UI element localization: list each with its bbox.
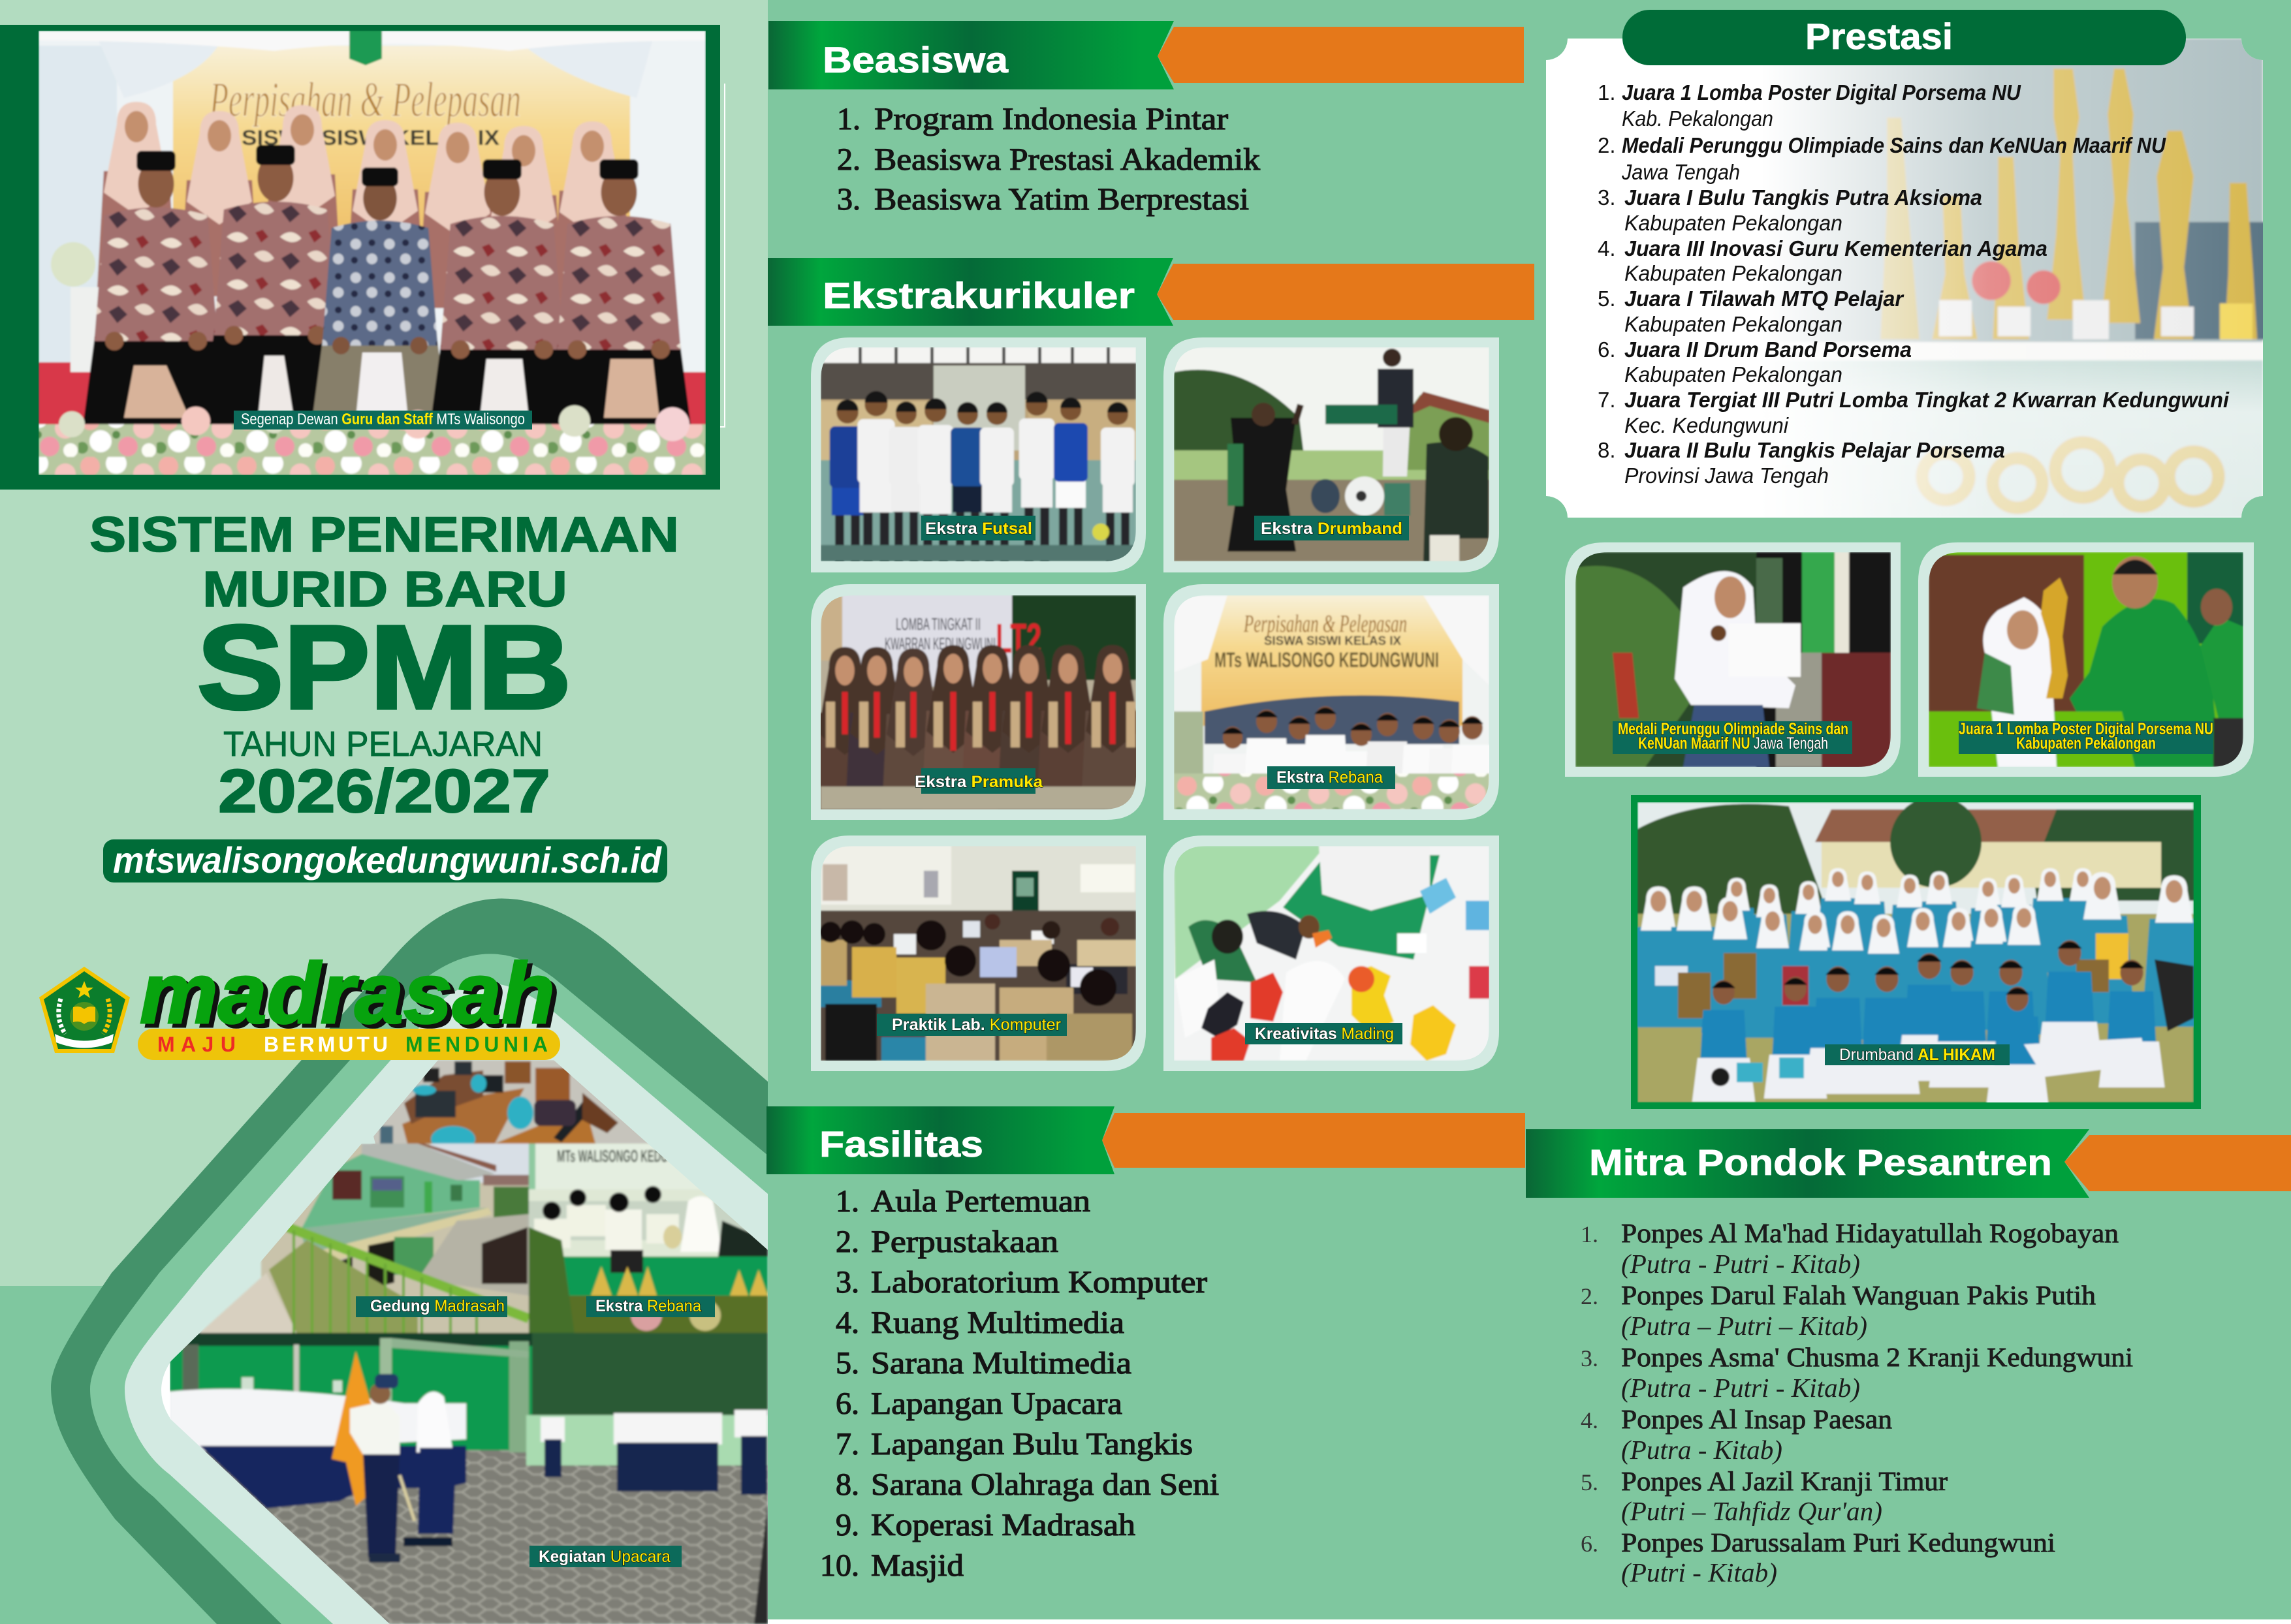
banner: Beasiswa: Beasiswa [823, 39, 1009, 80]
list: Prestasi: Juara I Tilawah MTQ Pelajar [1624, 287, 1904, 311]
list: Fasilitas: Aula Pertemuan [871, 1184, 1090, 1219]
list: Prestasi: Kec. Kedungwuni [1624, 413, 1790, 437]
list: Mitra Pondok Pesantren: 6. [1581, 1531, 1598, 1557]
banner: Beasiswa [768, 21, 1524, 89]
list: Prestasi: Kabupaten Pekalongan [1624, 211, 1842, 235]
caption: staff photo: Segenap Dewan Guru dan Staff MTs Walisongo [241, 411, 525, 428]
list: Prestasi: Juara II Bulu Tangkis Pelajar Porsema [1624, 438, 2005, 462]
banner: Mitra Pondok Pesantren [1526, 1129, 2291, 1198]
list: Mitra Pondok Pesantren: 1. [1581, 1221, 1598, 1247]
list: Fasilitas: 8. [836, 1467, 859, 1502]
list: Prestasi: 4. [1598, 236, 1616, 260]
photo card: Ekstra Pramuka: KWARRAN KEDUNGWUNI [885, 634, 996, 653]
photo card: Ekstra Rebana: Ekstra Rebana [1276, 768, 1383, 787]
list: Beasiswa: Beasiswa Prestasi Akademik [874, 142, 1260, 177]
list: Mitra Pondok Pesantren: 4. [1581, 1407, 1598, 1433]
list: Prestasi: 5. [1598, 287, 1616, 311]
collage: rebana group [529, 1144, 768, 1334]
heading pill: Prestasi: Prestasi [1805, 16, 1953, 57]
photo collage [170, 1060, 768, 1624]
list: Mitra Pondok Pesantren: (Putra - Putri - Kitab) [1621, 1249, 1860, 1279]
title: Sistem Penerimaan Murid Baru: SISTEM PENERIMAAN [89, 507, 679, 563]
photo card: Ekstra Rebana [1163, 584, 1502, 839]
list: Mitra Pondok Pesantren: Ponpes Asma' Chusma 2 Kranji Kedungwuni [1621, 1342, 2133, 1372]
list: Fasilitas: Laboratorium Komputer [871, 1265, 1207, 1300]
heading: SPMB: SPMB [197, 601, 571, 734]
tagline pill: Maju Bermutu Mendunia: BERMUTU [264, 1033, 388, 1056]
list: Fasilitas: Lapangan Bulu Tangkis [871, 1427, 1193, 1461]
list: Prestasi: Medali Perunggu Olimpiade Sains dan KeNUan Maarif NU [1622, 133, 2166, 157]
list: Fasilitas: Sarana Olahraga dan Seni [871, 1467, 1219, 1502]
photo card: Ekstra Futsal: Ekstra Futsal [925, 520, 1032, 538]
photo card: Kreativitas Mading [1163, 835, 1499, 1071]
list: Fasilitas: Ruang Multimedia [871, 1305, 1124, 1340]
list: Mitra Pondok Pesantren: Ponpes Darul Falah Wanguan Pakis Putih [1621, 1280, 2096, 1310]
photo card: Ekstra Pramuka: LOMBA TINGKAT II [896, 614, 981, 634]
list: Beasiswa: Program Indonesia Pintar [874, 102, 1228, 136]
list: Fasilitas: Masjid [871, 1548, 964, 1583]
list: Prestasi: 7. [1598, 388, 1616, 412]
photo card: Ekstra Drumband [1163, 337, 1499, 572]
list: Mitra Pondok Pesantren: Ponpes Darussalam Puri Kedungwuni [1621, 1527, 2055, 1557]
caption: Ekstra Rebana: Ekstra Rebana [595, 1297, 701, 1315]
list: Mitra Pondok Pesantren [1581, 1218, 2133, 1587]
list: Fasilitas: Lapangan Upacara [871, 1386, 1122, 1421]
photo card: Ekstra Rebana: MTs WALISONGO KEDUNGWUNI [1214, 648, 1439, 672]
list: Beasiswa: Beasiswa Yatim Berprestasi [874, 182, 1249, 217]
list: Prestasi: Juara II Drum Band Porsema [1624, 337, 1912, 362]
photo frame: staff group photo: SISWA SISWI KELAS IX [242, 126, 500, 149]
photo: Drumband Al Hikam [1628, 795, 2206, 1109]
photo frame: staff group photo [0, 25, 720, 490]
photo card: Ekstra Pramuka: Ekstra Pramuka [915, 773, 1043, 791]
list: Mitra Pondok Pesantren: 2. [1581, 1283, 1598, 1309]
photo card: poster trophy [1918, 542, 2254, 777]
list: Mitra Pondok Pesantren: 5. [1581, 1469, 1598, 1495]
photo card: poster trophy: Juara 1 Lomba Poster Digital Porsema NU [1959, 720, 2213, 738]
logo: Madrasah wordmark: madrasah [144, 949, 560, 1045]
list: Prestasi: 3. [1598, 185, 1616, 210]
collage: flag ceremony [170, 1333, 768, 1624]
panel: right background [767, 0, 2291, 1619]
text: Tahun Pelajaran: TAHUN PELAJARAN [223, 725, 543, 764]
list: Fasilitas: 10. [820, 1548, 859, 1583]
list: Prestasi: 6. [1598, 337, 1616, 362]
title: Sistem Penerimaan Murid Baru [89, 507, 679, 617]
list: Mitra Pondok Pesantren: (Putra - Putri - Kitab) [1621, 1373, 1860, 1403]
photo card: Praktik Lab Komputer: Praktik Lab. Komputer [892, 1016, 1061, 1034]
list: Beasiswa: 2. [837, 142, 861, 177]
list: Fasilitas [820, 1184, 1219, 1583]
decorative chevron with photos [51, 898, 768, 1624]
list: Fasilitas: Koperasi Madrasah [871, 1508, 1135, 1542]
list: Mitra Pondok Pesantren: (Putra - Kitab) [1621, 1435, 1782, 1465]
panel: Prestasi [1546, 39, 2266, 518]
caption: Gedung Madrasah: Gedung Madrasah [370, 1297, 505, 1315]
banner: Fasilitas: Fasilitas [819, 1123, 983, 1164]
list: Fasilitas: 3. [836, 1265, 859, 1300]
photo card: Ekstra Rebana: SISWA SISWI KELAS IX [1264, 634, 1401, 648]
list: Mitra Pondok Pesantren: 3. [1581, 1345, 1598, 1371]
list: Beasiswa [837, 102, 1260, 217]
list: Mitra Pondok Pesantren: (Putri - Kitab) [1621, 1557, 1777, 1587]
photo card: Ekstra Pramuka: LT2 [996, 615, 1041, 662]
collage: school building [200, 1144, 530, 1334]
list: Prestasi: Kabupaten Pekalongan [1624, 261, 1842, 285]
list: Prestasi: 1. [1598, 80, 1616, 104]
title: Sistem Penerimaan Murid Baru: MURID BARU [202, 561, 567, 617]
text: school year: 2026/2027 [218, 757, 550, 825]
list: Fasilitas: Sarana Multimedia [871, 1346, 1131, 1381]
list: Prestasi: Juara I Bulu Tangkis Putra Aksioma [1624, 185, 1982, 210]
photo card: Praktik Lab Komputer [811, 835, 1146, 1071]
photo: trophies background [1546, 39, 2266, 518]
photo card: Ekstra Pramuka [811, 584, 1146, 824]
list: Fasilitas: 6. [836, 1386, 859, 1421]
collage: computer lab [372, 1060, 653, 1152]
photo card: Ekstra Rebana: Perpisahan & Pelepasan [1243, 610, 1407, 638]
photo card: medal and certificate [1565, 542, 1901, 777]
list: Fasilitas: 9. [836, 1508, 859, 1542]
list: Prestasi: Juara III Inovasi Guru Kementerian Agama [1624, 236, 2047, 260]
list: Fasilitas: 2. [836, 1225, 859, 1259]
list: Prestasi: Juara 1 Lomba Poster Digital Porsema NU [1622, 80, 2021, 104]
photo card: Kreativitas Mading: Kreativitas Mading [1255, 1025, 1394, 1043]
list: Prestasi [1598, 80, 2230, 488]
list: Prestasi: Kabupaten Pekalongan [1624, 312, 1842, 336]
list: Prestasi: 8. [1598, 438, 1616, 462]
list: Fasilitas: 1. [836, 1184, 859, 1219]
banner: Ekstrakurikuler: Ekstrakurikuler [823, 275, 1135, 316]
list: Beasiswa: 3. [837, 182, 861, 217]
list: Mitra Pondok Pesantren: (Putri – Tahfidz Qur'an) [1621, 1496, 1882, 1526]
list: Prestasi: Provinsi Jawa Tengah [1624, 463, 1829, 488]
tagline pill: Maju Bermutu Mendunia: M A J U [157, 1033, 236, 1056]
heading pill: Prestasi [1622, 10, 2186, 65]
banner: Ekstrakurikuler [768, 258, 1534, 326]
list: Beasiswa: 1. [837, 102, 861, 136]
list: Prestasi: Kab. Pekalongan [1622, 106, 1773, 131]
list: Prestasi: Juara Tergiat III Putri Lomba Tingkat 2 Kwarran Kedungwuni [1624, 388, 2230, 412]
banner: Mitra Pondok Pesantren: Mitra Pondok Pesantren [1589, 1142, 2052, 1183]
panel: left cover [0, 0, 768, 1624]
list: Mitra Pondok Pesantren: Ponpes Al Jazil Kranji Timur [1621, 1466, 1948, 1496]
list: Mitra Pondok Pesantren: Ponpes Al Ma'had Hidayatullah Rogobayan [1621, 1218, 2119, 1248]
website pill: mtswalisongokedungwuni.sch.id [113, 839, 663, 881]
caption: Kegiatan Upacara: Kegiatan Upacara [539, 1548, 671, 1566]
photo card: medal and certificate: KeNUan Maarif NU Jawa Tengah [1638, 734, 1828, 753]
photo card: Ekstra Drumband: Ekstra Drumband [1261, 520, 1402, 538]
list: Fasilitas: 7. [836, 1427, 859, 1461]
list: Fasilitas: 5. [836, 1346, 859, 1381]
list: Prestasi: Kabupaten Pekalongan [1624, 362, 1842, 386]
tagline pill: Maju Bermutu Mendunia [138, 1029, 560, 1060]
list: Prestasi: 2. [1598, 133, 1616, 157]
list: Fasilitas: Perpustakaan [871, 1225, 1058, 1259]
photo frame: staff group photo: Perpisahan & Pelepasan [209, 72, 521, 127]
list: Fasilitas: 4. [836, 1305, 859, 1340]
tagline pill: Maju Bermutu Mendunia: MENDUNIA [405, 1033, 548, 1056]
photo card: medal and certificate: Medali Perunggu Olimpiade Sains dan [1618, 720, 1848, 738]
photo card: Ekstra Futsal [811, 337, 1146, 572]
banner: Fasilitas [766, 1106, 1525, 1174]
icon: ministry emblem [39, 967, 130, 1053]
list: Mitra Pondok Pesantren: Ponpes Al Insap Paesan [1621, 1404, 1892, 1434]
photo: Drumband Al Hikam: Drumband AL HIKAM [1839, 1046, 1995, 1064]
photo card: poster trophy: Kabupaten Pekalongan [2016, 734, 2156, 753]
collage: rebana group: MTs WALISONGO KEDU [557, 1146, 668, 1166]
logo: Madrasah wordmark: madrasah [140, 945, 555, 1041]
list: Prestasi: Jawa Tengah [1621, 160, 1740, 184]
list: Mitra Pondok Pesantren: (Putra – Putri – Kitab) [1621, 1311, 1867, 1341]
